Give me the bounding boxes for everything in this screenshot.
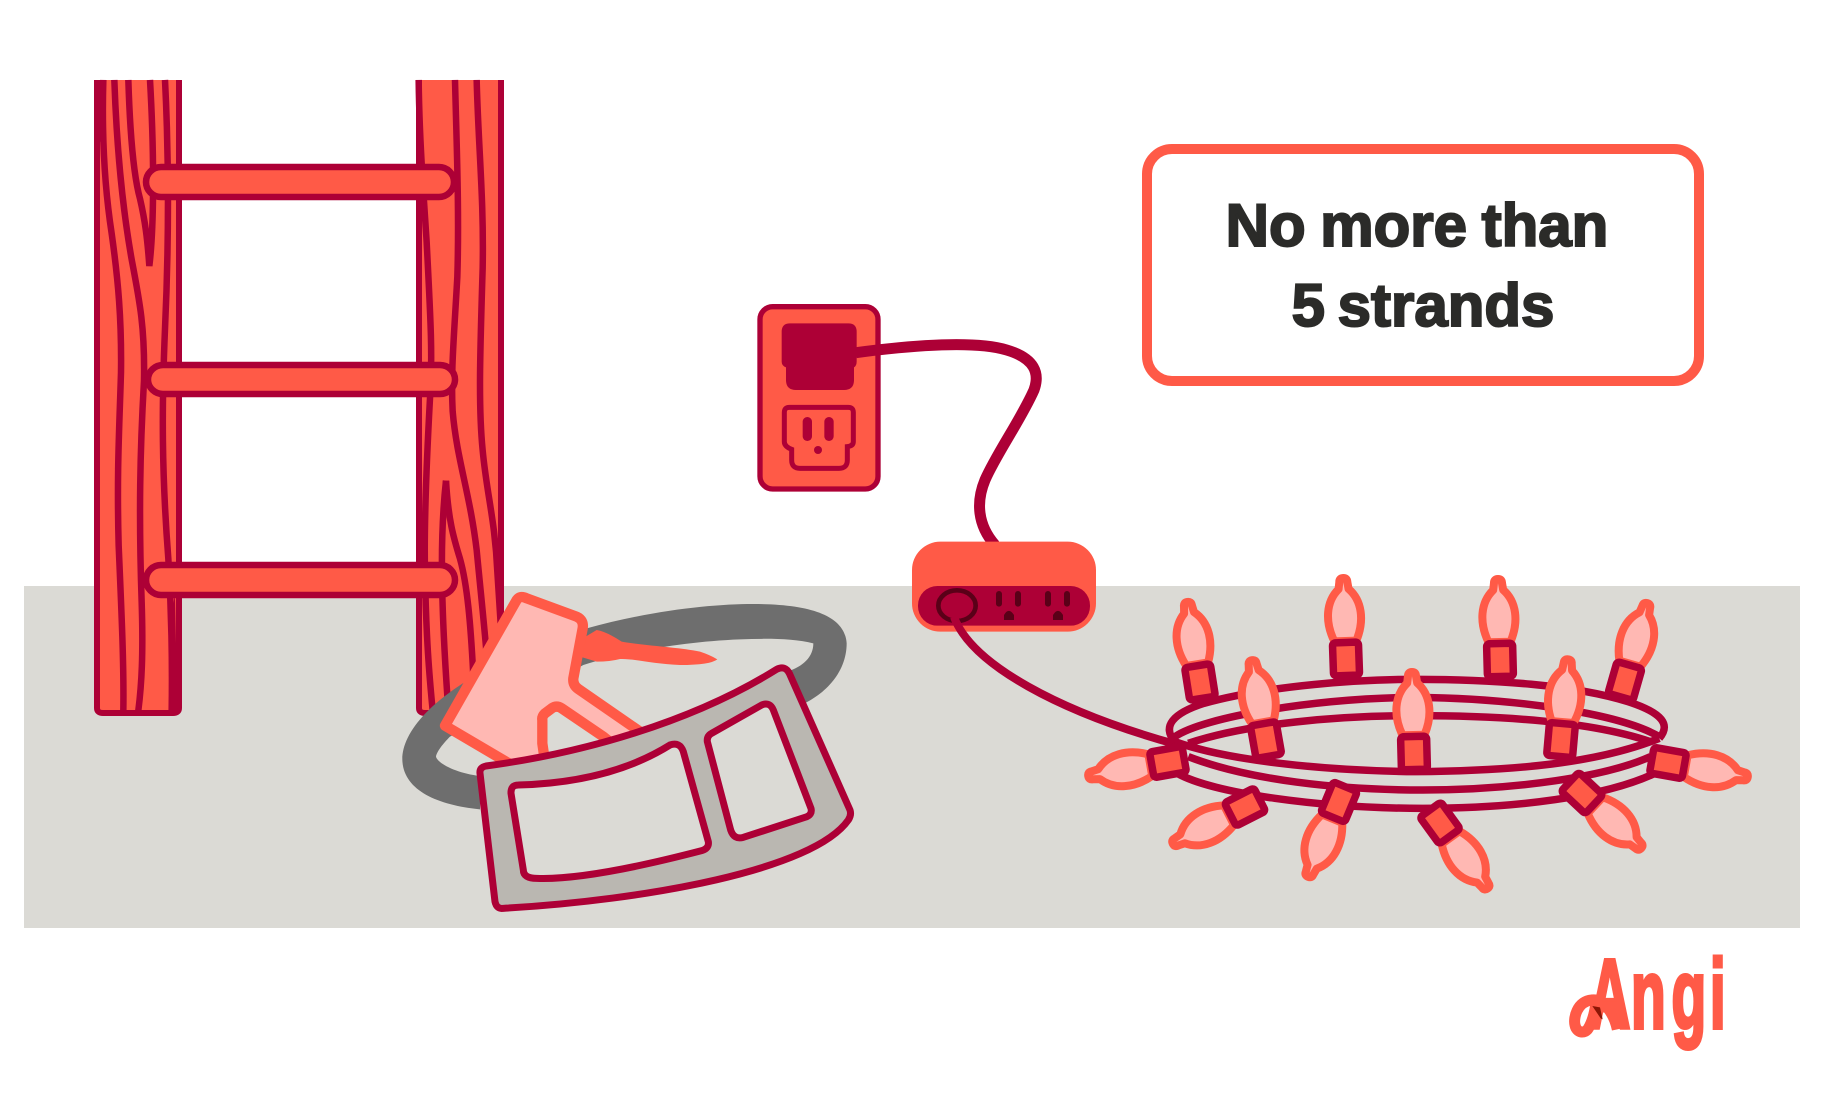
coiled light strands [1169,679,1664,808]
plug [782,323,857,390]
orange spout [580,630,717,665]
ladder left rail [94,80,179,713]
callout: no more than 5 strands: No more than [1226,192,1608,259]
callout: no more than 5 strands [1147,149,1699,381]
empty socket [784,407,853,468]
ladder right rail [419,80,501,713]
wall plate [760,307,878,489]
grey window frame [480,668,851,908]
logo: Angi: Angi [1589,939,1726,1049]
grey hose ring [402,604,847,809]
pink nozzle [445,597,640,777]
string lights [954,577,1751,898]
ladder rungs [146,167,455,595]
floor [24,586,1800,928]
cord to light strands [954,617,1175,744]
wall outlet and extension strip [760,307,1096,632]
callout: no more than 5 strands: 5 strands [1292,272,1554,339]
light bulbs [1085,577,1751,898]
ladder [94,80,501,713]
power cord [856,345,1036,545]
extension strip [912,542,1096,632]
grey ring and spout [402,597,851,908]
